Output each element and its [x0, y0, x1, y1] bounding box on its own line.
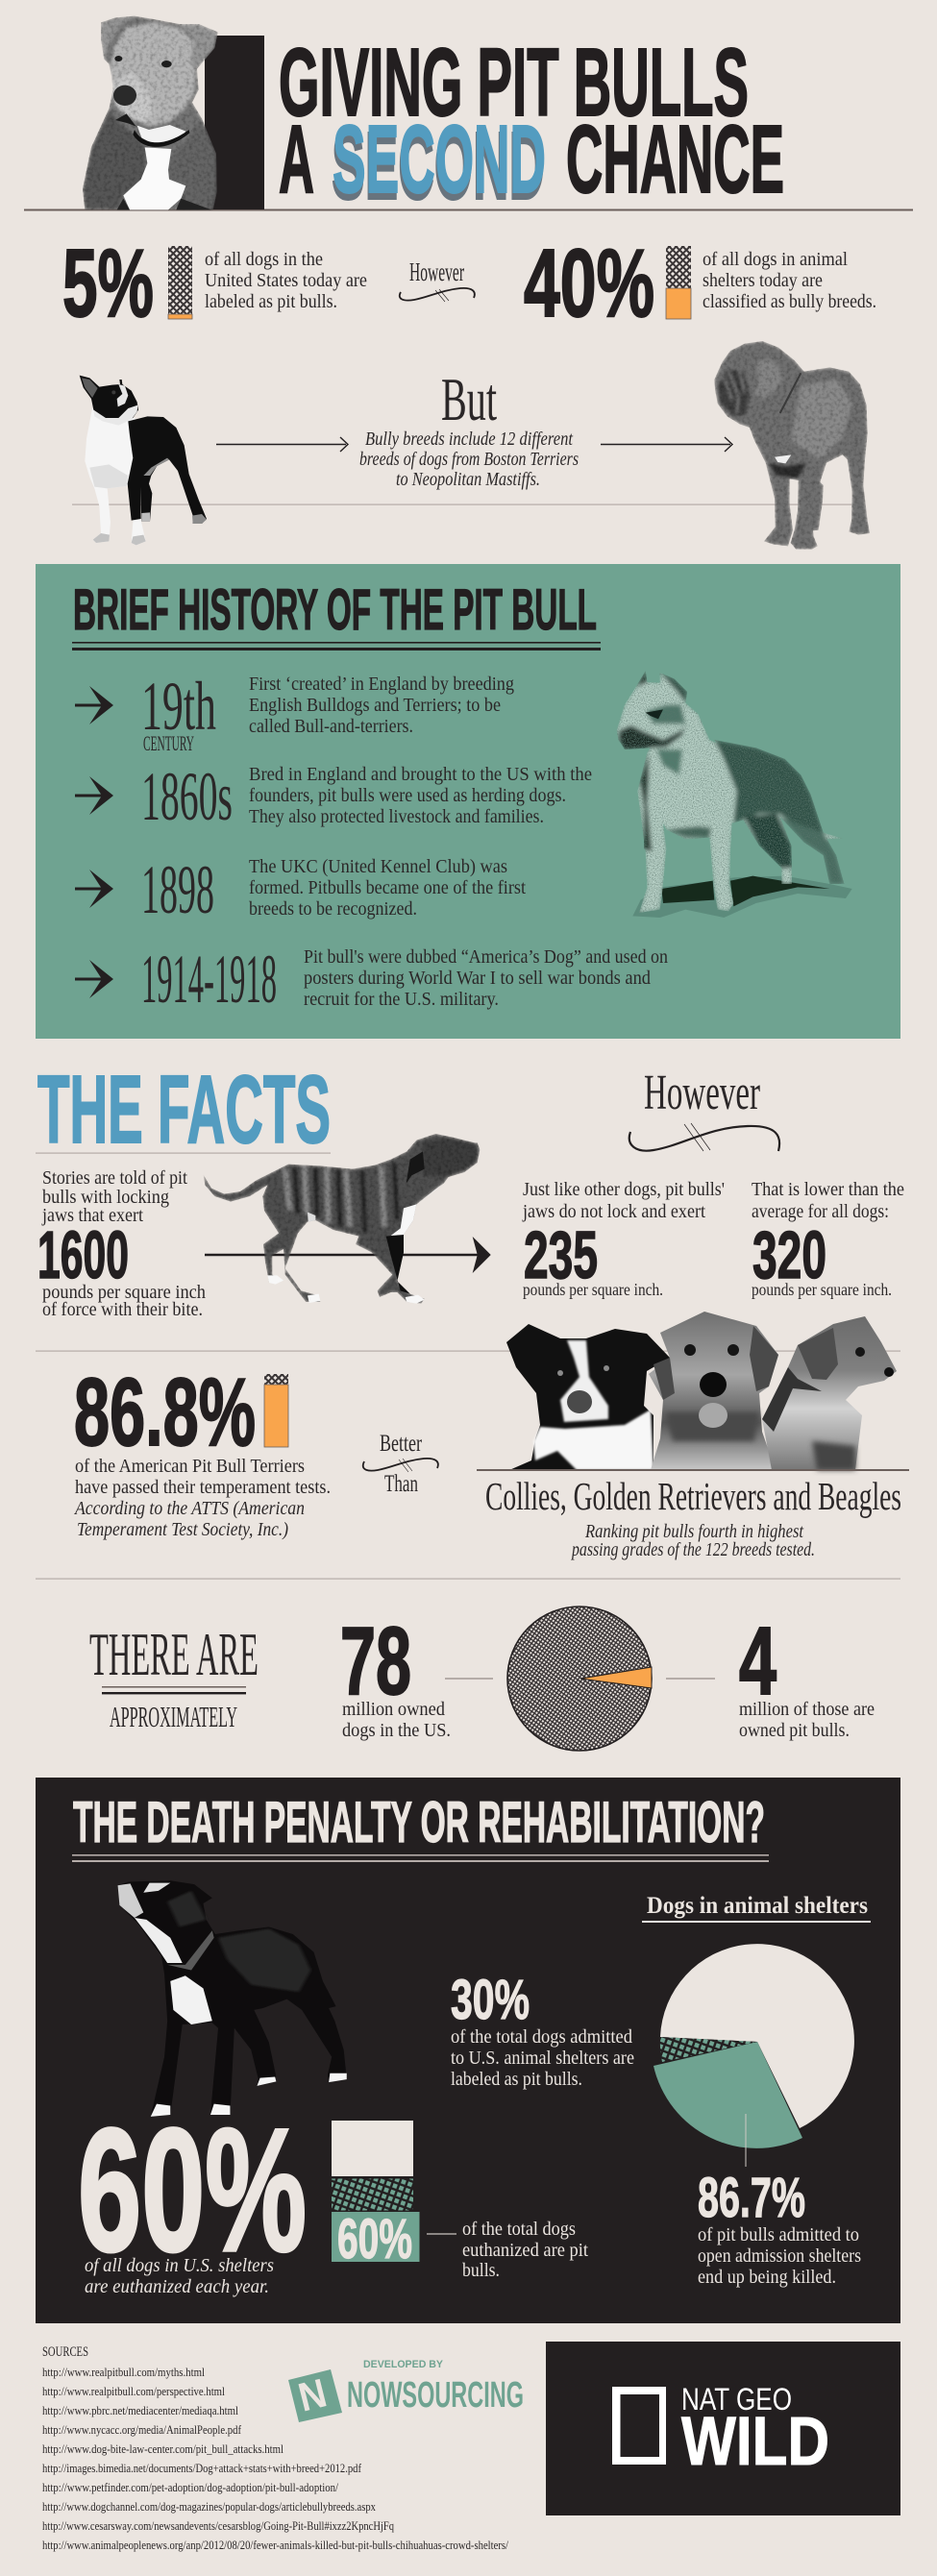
row: 19th century: First ‘created’ in England by breeding [249, 674, 514, 695]
bite claim: jaws that exert [41, 1205, 143, 1226]
however connector [400, 258, 475, 302]
temperament stat: of the American Pit Bull Terriers [75, 1456, 305, 1477]
stat: 40 percent: of all dogs in animal [703, 249, 848, 270]
title [279, 29, 784, 220]
row: 19th century: called Bull-and-terriers. [249, 716, 413, 737]
stat: 86.7 percent: end up being killed. [698, 2267, 836, 2288]
sources list: http://www.cesarsway.com/newsandevents/cesarsblog/Going-Pit-Bull#ixzz2KpncHjFq [42, 2518, 394, 2533]
stat: 86.7 percent: 86.7% [698, 2167, 805, 2229]
stat: 86.7 percent: open admission shelters [698, 2245, 861, 2267]
stat: 60 percent euthanized: of all dogs in U.S. shelters [85, 2255, 274, 2276]
bully breeds text: breeds of dogs from Boston Terriers [359, 449, 579, 470]
section: owned dogs [36, 1578, 900, 1751]
sources list: http://www.pbrc.net/mediacenter/mediaqa.html [42, 2403, 238, 2417]
arrow: left [216, 437, 348, 452]
icon: pit bull portrait [83, 16, 218, 209]
stat: 86.7 percent [698, 2167, 861, 2288]
title backing block [205, 36, 264, 209]
fact: 235: 235 [524, 1217, 598, 1292]
stat: 86.7 percent: of pit bulls admitted to [698, 2224, 859, 2245]
sources list: http://www.petfinder.com/pet-adoption/dog-adoption/pit-bull-adoption/ [42, 2480, 338, 2494]
sources list: http://www.realpitbull.com/perspective.html [42, 2384, 225, 2398]
bully breeds text: Bully breeds include 12 different [365, 429, 573, 450]
row: 1914-1918: Pit bull's were dubbed “America’s Dog” and used on [304, 946, 668, 968]
bite claim: pounds per square inch [42, 1282, 206, 1303]
stat: 60 percent euthanized: are euthanized each year. [85, 2276, 269, 2297]
stat: 30 percent: labeled as pit bulls. [451, 2069, 582, 2090]
better than flourish: Than [384, 1471, 418, 1497]
logo: nowsourcing: NOWSOURCING [347, 2375, 524, 2416]
bite claim: of force with their bite. [42, 1299, 203, 1320]
icon: brindle dog [204, 1134, 480, 1304]
row: 1898 [75, 851, 526, 928]
fact: 235: jaws do not lock and exert [522, 1201, 705, 1222]
sources list [42, 2344, 508, 2552]
row: 19th century: English Bulldogs and Terriers; to be [249, 695, 501, 716]
logo: nat geo wild [546, 2342, 900, 2515]
panel: death penalty or rehabilitation [36, 1778, 900, 2323]
row: 1898: 1898 [141, 851, 214, 928]
sources list: http://www.dog-bite-law-center.com/pit_bull_attacks.html [42, 2441, 284, 2456]
fact: 320: That is lower than the [752, 1179, 904, 1200]
bully breeds text [359, 429, 579, 490]
fact: 320 [752, 1179, 904, 1299]
however flourish [629, 1066, 779, 1151]
stat: 60 percent euthanized: 60% [78, 2092, 307, 2288]
stat: 5 percent [62, 230, 367, 337]
stat: 30 percent: of the total dogs admitted [451, 2026, 632, 2048]
euthanized text [462, 2219, 588, 2281]
temperament stat [73, 1359, 331, 1540]
row: 1898: breeds to be recognized. [249, 898, 417, 920]
stat: 60 percent euthanized [78, 2092, 307, 2297]
fact: 320: average for all dogs: [752, 1201, 889, 1222]
stat: 5 percent: labeled as pit bulls. [205, 291, 337, 312]
row: 1860s: 1860s [141, 758, 233, 835]
row: 1898: The UKC (United Kennel Club) was [249, 856, 507, 877]
heading: But: But [441, 365, 497, 433]
however connector: However [409, 258, 464, 286]
row: 1914-1918: recruit for the U.S. military. [304, 989, 499, 1010]
header [24, 16, 913, 220]
bite claim: bulls with locking [42, 1187, 169, 1208]
stat: 30 percent [451, 1969, 634, 2090]
stat: 4 million [739, 1607, 875, 1741]
icon: boston terrier [80, 376, 207, 545]
arrow: 1600 to 235 [205, 1240, 489, 1269]
better than flourish [363, 1431, 438, 1497]
stat: 4 million: owned pit bulls. [739, 1720, 850, 1741]
row: 1914-1918: 1914-1918 [141, 941, 277, 1018]
row: 1860s [75, 758, 592, 835]
sources list: http://www.nycacc.org/media/AnimalPeople.pdf [42, 2422, 242, 2437]
row: 1898: formed. Pitbulls became one of the first [249, 877, 526, 898]
pie chart: dogs in shelters [653, 1944, 854, 2148]
pie chart: pit bull share [507, 1607, 652, 1751]
history heading [72, 577, 601, 650]
stat: 30 percent: 30% [451, 1969, 530, 2031]
panel: brief history [36, 564, 900, 1039]
row: 1860s: They also protected livestock and families. [249, 806, 544, 827]
stat: 30 percent: to U.S. animal shelters are [451, 2048, 634, 2069]
stat: 40 percent [524, 230, 876, 337]
pie chart heading: Dogs in animal shelters [647, 1893, 868, 1919]
row: 1860s: Bred in England and brought to the US with the [249, 764, 592, 785]
fact: 235: Just like other dogs, pit bulls' [523, 1179, 725, 1200]
collies caption: passing grades of the 122 breeds tested. [570, 1539, 815, 1560]
wordmark [681, 2382, 829, 2480]
sources list: http://www.realpitbull.com/myths.html [42, 2365, 205, 2379]
square chart: euthanized share [332, 2121, 419, 2270]
euthanized text: of the total dogs [462, 2219, 576, 2240]
stat: 5 percent: 5% [62, 230, 154, 337]
bite claim: Stories are told of pit [42, 1167, 187, 1189]
square chart: euthanized share: 60% [337, 2208, 412, 2270]
temperament stat: have passed their temperament tests. [75, 1477, 331, 1498]
logo: nowsourcing: N [294, 2369, 331, 2420]
row: 19th century [75, 668, 514, 755]
stat: 78 million: 78 [340, 1607, 411, 1715]
row: 1914-1918: posters during World War I to sell war bonds and [304, 968, 651, 989]
icon: collie, golden retriever and beagle [506, 1312, 897, 1470]
bully breeds text: to Neopolitan Mastiffs. [396, 469, 540, 490]
euthanized text: euthanized are pit [462, 2240, 588, 2261]
temperament stat: According to the ATTS (American [73, 1498, 305, 1519]
however flourish: However [644, 1066, 760, 1120]
yellow-frame mark [612, 2387, 666, 2465]
stat: 40 percent: 40% [524, 230, 654, 337]
icon: engraved pit bull [617, 671, 852, 918]
sources list: http://www.dogchannel.com/dog-magazines/popular-dogs/articlebullybreeds.aspx [42, 2499, 376, 2514]
title: A [279, 106, 314, 213]
bite claim: 1600 [37, 1217, 129, 1292]
fact: 320: 320 [752, 1217, 826, 1292]
row: 1860s: founders, pit bulls were used as herding dogs. [249, 785, 566, 806]
collies caption [485, 1474, 901, 1560]
sources list: http://images.bimedia.net/documents/Dog+attack+stats+with+breed+2012.pdf [42, 2461, 362, 2475]
stat: 4 million: million of those are [739, 1699, 875, 1720]
temperament stat: Temperament Test Society, Inc.) [77, 1519, 288, 1540]
fact: 235 [522, 1179, 725, 1299]
stat: 78 million: dogs in the US. [342, 1720, 451, 1741]
stat: 78 million: million owned [342, 1699, 445, 1720]
stat: 40 percent: shelters today are [703, 270, 823, 291]
arrow: right [601, 437, 732, 452]
collies caption: Ranking pit bulls fourth in highest [584, 1521, 803, 1542]
wordmark: NAT GEO [681, 2382, 792, 2417]
logo: nowsourcing [288, 2359, 524, 2422]
stat: 40 percent: classified as bully breeds. [703, 291, 876, 312]
row: 1914-1918 [75, 941, 668, 1018]
temperament stat: 86.8% [74, 1359, 256, 1466]
section: the facts [36, 1056, 909, 1560]
there are approximately: APPROXIMATELY [110, 1700, 237, 1733]
row: 19th century: CENTURY [143, 731, 194, 755]
fact: 320: pounds per square inch. [752, 1280, 892, 1299]
stat: 5 percent: of all dogs in the [205, 249, 323, 270]
heading: the facts: THE FACTS [37, 1056, 331, 1164]
bite claim [37, 1167, 206, 1320]
stat: 5 percent: United States today are [205, 270, 367, 291]
sources list: http://www.animalpeoplenews.org/anp/2012/08/20/fewer-animals-killed-but-pit-bulls-chihuahuas-crowd-shelters/ [42, 2538, 508, 2552]
title: SECOND [332, 112, 545, 220]
title: SECOND [333, 106, 546, 213]
row: 19th century: 19th [141, 668, 216, 745]
there are approximately [89, 1621, 259, 1733]
icon: black pit bull [118, 1880, 347, 2117]
stat: 4 million: 4 [739, 1607, 777, 1715]
logo: nowsourcing: DEVELOPED BY [363, 2359, 444, 2370]
fact: 235: pounds per square inch. [523, 1280, 663, 1299]
sources list: SOURCES [42, 2344, 88, 2360]
there are approximately: THERE ARE [89, 1621, 259, 1688]
icon: neapolitan mastiff [714, 341, 870, 550]
wordmark: WILD [681, 2404, 829, 2480]
bully breeds section [72, 341, 870, 550]
better than flourish: Better [380, 1431, 422, 1457]
euthanized text: bulls. [462, 2260, 500, 2281]
